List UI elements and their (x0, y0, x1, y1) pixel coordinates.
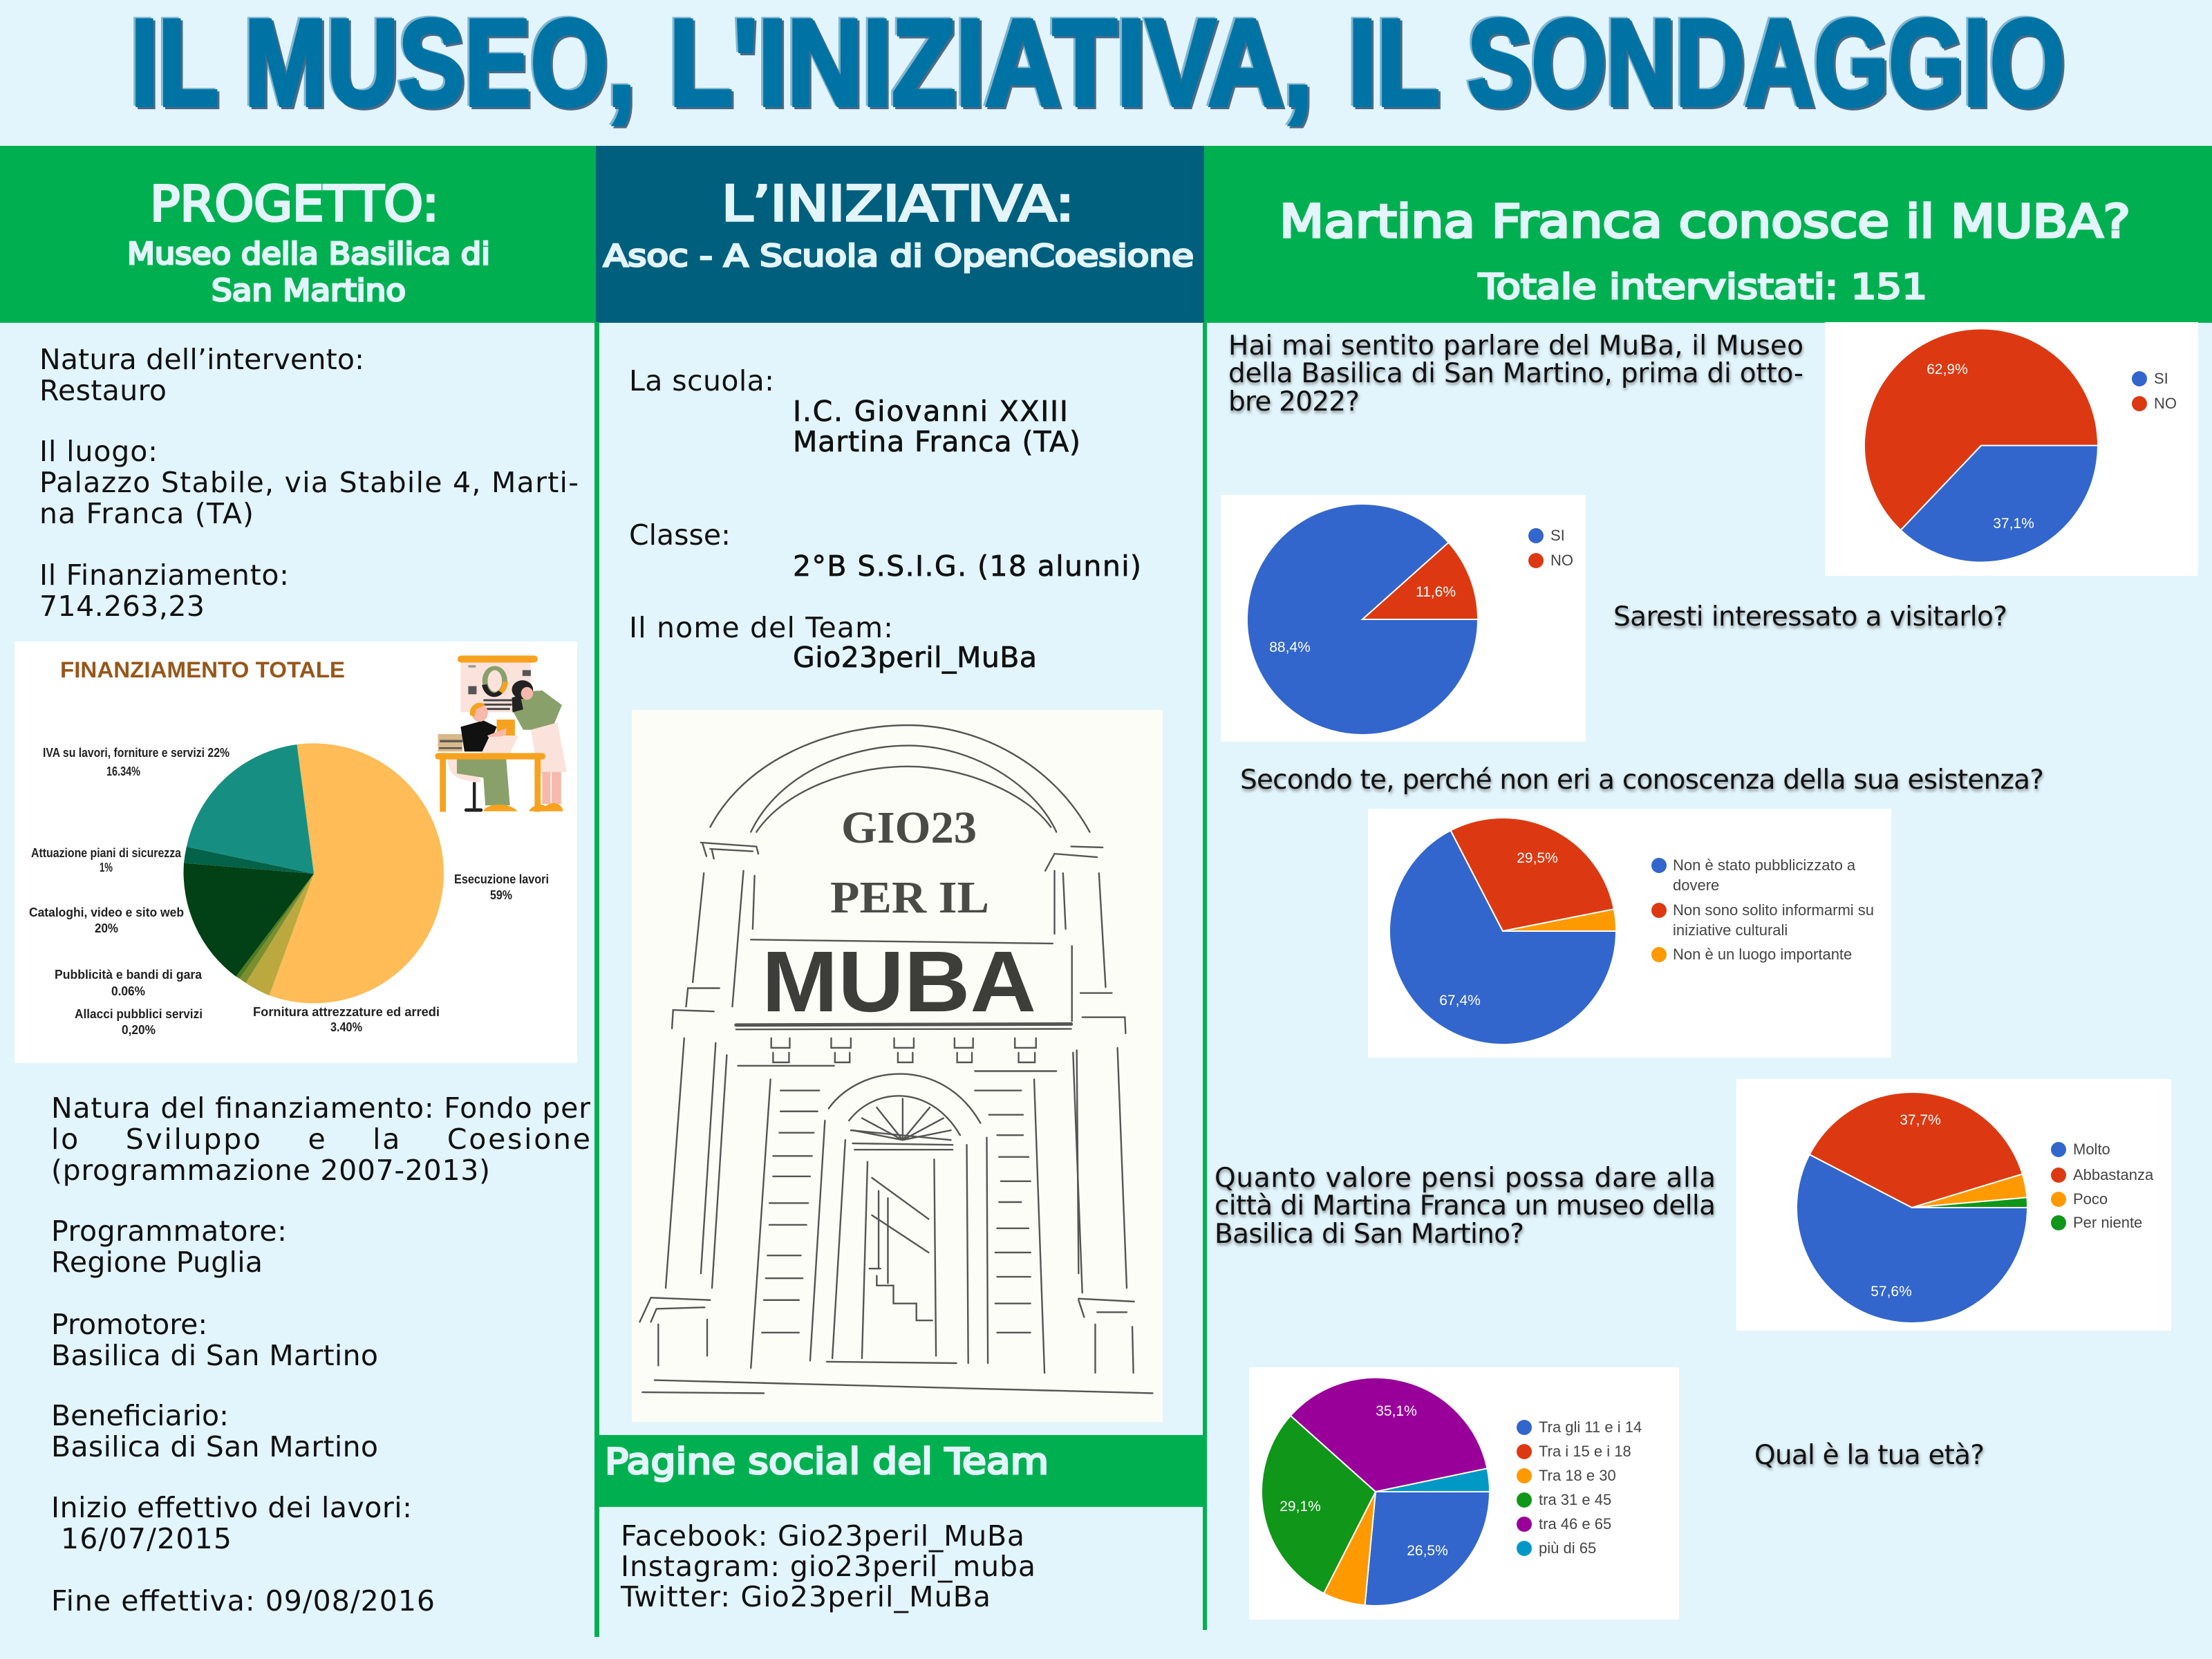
question: saresti interessato: Saresti interessato a visitarlo? (1613, 601, 2007, 632)
logo wording: PER IL (830, 872, 989, 923)
text block: la scuola, classe, team: Martina Franca (TA) (793, 425, 1080, 458)
logo line drawing (640, 725, 1152, 1394)
chart: motivi: Non è un luogo importante (1673, 946, 1852, 963)
question: hai mai sentito parlare: bre 2022? (1228, 386, 1360, 418)
text block: dati del finanziamento: Regione Puglia (51, 1246, 263, 1279)
chart: età: tra 46 e 65 (1539, 1515, 1611, 1533)
chart: interesse a visitare: 11,6% (1416, 584, 1456, 600)
text block: dati del finanziamento: 16/07/2015 (61, 1522, 232, 1555)
chart: età: 35,1% (1376, 1403, 1417, 1419)
text block: intervento, luogo, finanziamento: Il Finanziamento: (39, 559, 289, 592)
question: hai mai sentito parlare: Hai mai sentito parlare del MuBa, il Museo (1228, 330, 1803, 362)
text block: dati del finanziamento: Beneficiario: (51, 1399, 229, 1432)
chart: conoscenza del muba (1825, 322, 2198, 576)
chart: conoscenza del muba: 62,9% (1927, 362, 1968, 377)
chart labels: Cataloghi, video e sito web (29, 906, 184, 919)
chart: interesse a visitare (1221, 495, 1586, 742)
panel: iniziativa header: Asoc - A Scuola di OpenCoesione (603, 238, 1194, 274)
text block: dati del finanziamento: Basilica di San Martino (51, 1339, 378, 1372)
chart labels: 20% (95, 921, 118, 935)
chart: conoscenza del muba: NO (2154, 395, 2177, 412)
question: quanto valore: Quanto valore pensi possa dare alla (1215, 1163, 1716, 1194)
text block: la scuola, classe, team: La scuola: (629, 364, 774, 397)
text block: la scuola, classe, team: Gio23peril_MuBa (793, 641, 1037, 674)
panel: pagine social header (596, 1435, 1207, 1507)
text block: social: Facebook: Gio23peril_MuBa (621, 1519, 1024, 1553)
chart: età (1249, 1367, 1679, 1620)
chart labels: 16.34% (106, 765, 140, 778)
logo wording: MUBA (762, 934, 1036, 1030)
text block: la scuola, classe, team: 2°B S.S.I.G. (18 alunni) (793, 550, 1141, 583)
logo wording: GIO23 (841, 803, 977, 853)
icon: people at desk with chart (435, 655, 567, 812)
chart: valore del museo: Per niente (2073, 1214, 2142, 1231)
chart: valore del museo: 57,6% (1871, 1284, 1912, 1300)
text block: dati del finanziamento: Natura del finanziamento: Fondo per (51, 1091, 590, 1125)
question: qual è la tua età: Qual è la tua età? (1754, 1440, 1985, 1471)
text block: social (620, 1519, 1035, 1613)
panel: logo gio23 per il muba (632, 710, 1163, 1422)
chart labels: Fornitura attrezzature ed arredi (253, 1005, 440, 1019)
text block: dati del finanziamento: Inizio effettivo dei lavori: (51, 1491, 412, 1524)
text block: intervento, luogo, finanziamento (39, 343, 579, 623)
text block: intervento, luogo, finanziamento: na Franca (TA) (39, 497, 254, 530)
chart: motivi: 67,4% (1439, 993, 1481, 1009)
text block: la scuola, classe, team (629, 364, 1141, 674)
text block: intervento, luogo, finanziamento: Il luogo: (39, 435, 158, 468)
chart labels: 0.06% (111, 984, 145, 998)
chart: motivi: 29,5% (1517, 850, 1558, 866)
chart labels: 1% (100, 861, 113, 874)
text block: social: Instagram: gio23peril_muba (621, 1550, 1035, 1583)
question: hai mai sentito parlare: della Basilica di San Martino, prima di otto- (1228, 358, 1803, 389)
text block: intervento, luogo, finanziamento: Palazzo Stabile, via Stabile 4, Marti- (39, 466, 579, 499)
text block: dati del finanziamento: Basilica di San Martino (51, 1430, 378, 1463)
chart: valore del museo (1736, 1079, 2171, 1331)
chart: interesse a visitare: NO (1550, 552, 1573, 569)
chart: valore del museo: 37,7% (1900, 1112, 1941, 1128)
panel: sondaggio header (1204, 146, 2212, 323)
chart labels: Pubblicità e bandi di gara (55, 968, 203, 982)
pie chart: finanziamento (184, 743, 444, 1003)
chart: motivi: Non è stato pubblicizzato a (1673, 856, 1856, 874)
panel: pagine social header: Pagine social del Team (605, 1441, 1049, 1483)
chart labels: Attuazione piani di sicurezza (31, 846, 182, 860)
chart labels: IVA su lavori, forniture e servizi 22% (43, 746, 229, 760)
text block: la scuola, classe, team: Il nome del Team: (629, 611, 893, 644)
text block: social: Twitter: Gio23peril_MuBa (620, 1580, 991, 1613)
chart title: FINANZIAMENTO TOTALE (60, 657, 345, 682)
panel: progetto header (0, 146, 596, 323)
chart: età: tra 31 e 45 (1539, 1491, 1611, 1508)
chart: motivi: dovere (1673, 877, 1719, 894)
chart: età: Tra gli 11 e i 14 (1539, 1418, 1642, 1436)
panel: sondaggio header: Martina Franca conosce il MUBA? (1280, 195, 2130, 248)
chart: interesse a visitare: 88,4% (1269, 639, 1311, 655)
logo wording (762, 803, 1036, 1030)
text block: dati del finanziamento: Fine effettiva: 09/08/2016 (51, 1584, 435, 1618)
question: secondo te perché: Secondo te, perché non eri a conoscenza della sua esistenza? (1240, 765, 2044, 796)
chart: età: 29,1% (1280, 1499, 1321, 1515)
chart: età: Tra i 15 e i 18 (1539, 1443, 1631, 1460)
chart labels (29, 746, 549, 1037)
chart: motivi: iniziative culturali (1673, 921, 1788, 939)
panel: progetto header: San Martino (212, 273, 406, 308)
text block: intervento, luogo, finanziamento: Restauro (39, 374, 167, 407)
panel: sondaggio header: Totale intervistati: 151 (1478, 267, 1927, 307)
question: quanto valore: Basilica di San Martino? (1215, 1219, 1524, 1250)
chart: valore del museo: Molto (2073, 1141, 2110, 1158)
chart: conoscenza del muba: 37,1% (1993, 516, 2034, 532)
text block: dati del finanziamento: (programmazione 2007-2013) (51, 1154, 490, 1187)
text block: la scuola, classe, team: Classe: (629, 518, 731, 552)
chart: valore del museo: Poco (2073, 1190, 2108, 1208)
chart: età: più di 65 (1539, 1539, 1596, 1557)
chart: motivi (1368, 809, 1891, 1058)
title (129, 0, 2067, 133)
panel: progetto header: Museo della Basilica di (127, 236, 490, 272)
text block: intervento, luogo, finanziamento: Natura dell’intervento: (39, 343, 364, 376)
question: hai mai sentito parlare (1228, 330, 1803, 418)
text block: dati del finanziamento: lo Sviluppo e la Coesione (51, 1123, 590, 1156)
chart labels: Esecuzione lavori (454, 872, 549, 886)
text block: dati del finanziamento: Programmatore: (51, 1215, 287, 1248)
chart: interesse a visitare: SI (1550, 527, 1565, 544)
chart: motivi: Non sono solito informarmi su (1673, 901, 1874, 919)
chart labels: 0,20% (122, 1023, 156, 1037)
panel: progetto header: PROGETTO: (150, 176, 439, 232)
chart labels: 59% (490, 888, 512, 902)
question: quanto valore (1215, 1163, 1716, 1250)
chart labels: 3.40% (330, 1020, 362, 1034)
text block: dati del finanziamento: Promotore: (51, 1308, 207, 1341)
panel: iniziativa header (596, 146, 1204, 323)
text block: la scuola, classe, team: I.C. Giovanni XXIII (793, 395, 1068, 428)
text block: dati del finanziamento (51, 1091, 590, 1618)
chart: età: 26,5% (1407, 1543, 1448, 1559)
chart labels: Allacci pubblici servizi (75, 1007, 203, 1021)
question: quanto valore: città di Martina Franca un museo della (1215, 1190, 1716, 1221)
chart: età: Tra 18 e 30 (1539, 1467, 1616, 1484)
panel: finanziamento totale chart (15, 641, 577, 1063)
text block: intervento, luogo, finanziamento: 714.263,23 (39, 590, 205, 623)
panel: iniziativa header: L’INIZIATIVA: (722, 176, 1074, 232)
chart: conoscenza del muba: SI (2154, 370, 2168, 387)
chart: valore del museo: Abbastanza (2073, 1166, 2154, 1183)
